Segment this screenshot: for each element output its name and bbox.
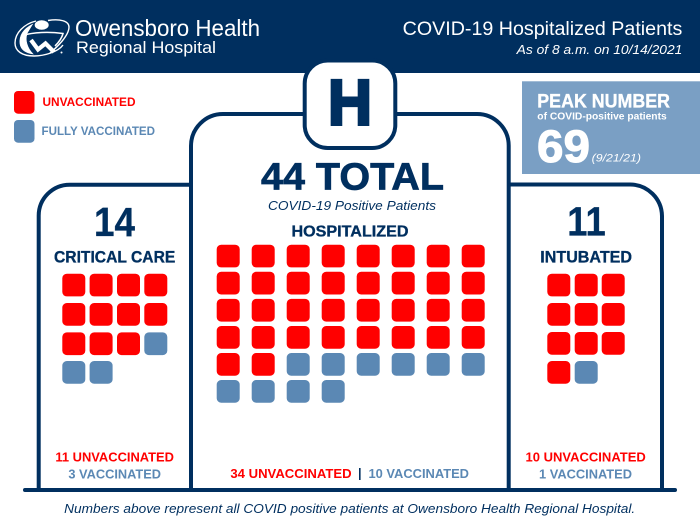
logo wordmark: Regional Hospital bbox=[76, 38, 216, 57]
hospitalized patient squares bbox=[217, 245, 485, 403]
critical care patient squares bbox=[62, 274, 167, 384]
intubated vaccination counts: 1 VACCINATED bbox=[539, 466, 632, 481]
panel: peak number: 69 bbox=[537, 121, 590, 172]
critical care count: 14 bbox=[94, 199, 135, 245]
panel: peak number: of COVID-positive patients bbox=[537, 112, 667, 122]
panel: peak number: PEAK NUMBER bbox=[537, 91, 670, 112]
hospitalized vaccination counts: 10 VACCINATED bbox=[368, 466, 469, 481]
critical care vaccination counts bbox=[55, 450, 174, 481]
intubated vaccination counts: 10 UNVACCINATED bbox=[526, 450, 646, 465]
panel: intubated bbox=[526, 199, 646, 481]
hospitalized vaccination counts: 34 UNVACCINATED bbox=[230, 466, 352, 481]
legend bbox=[14, 91, 155, 143]
legend: UNVACCINATED bbox=[42, 95, 136, 109]
panel: hospitalized bbox=[217, 156, 485, 481]
footer note: Numbers above represent all COVID positive patients at Owensboro Health Regional Hospital. bbox=[64, 501, 635, 516]
building outline frame bbox=[25, 114, 675, 490]
intubated patient squares bbox=[547, 274, 625, 384]
icon: hospital logo bbox=[15, 20, 69, 56]
critical care vaccination counts: 11 UNVACCINATED bbox=[55, 450, 174, 465]
intubated vaccination counts bbox=[526, 450, 646, 481]
hospitalized heading: HOSPITALIZED bbox=[292, 224, 408, 241]
logo wordmark: Owensboro Health bbox=[75, 15, 260, 41]
total caption: COVID-19 Positive Patients bbox=[268, 199, 436, 213]
panel: critical care bbox=[54, 199, 175, 481]
header banner bbox=[0, 0, 700, 73]
logo wordmark bbox=[75, 15, 260, 57]
icon: hospital H sign: H bbox=[328, 66, 372, 138]
total count: 44 TOTAL bbox=[261, 156, 444, 198]
critical care heading: CRITICAL CARE bbox=[54, 247, 175, 266]
panel: peak number: (9/21/21) bbox=[592, 153, 641, 165]
hospitalized vaccination counts bbox=[230, 466, 469, 481]
title: COVID-19 Hospitalized Patients bbox=[403, 19, 682, 40]
icon: hospital H sign bbox=[305, 60, 395, 148]
panel: peak number bbox=[522, 81, 700, 174]
legend: FULLY VACCINATED bbox=[42, 124, 155, 138]
intubated heading: INTUBATED bbox=[540, 247, 632, 266]
critical care vaccination counts: 3 VACCINATED bbox=[68, 466, 161, 481]
intubated count: 11 bbox=[567, 199, 606, 245]
date subtitle: As of 8 a.m. on 10/14/2021 bbox=[516, 42, 682, 57]
